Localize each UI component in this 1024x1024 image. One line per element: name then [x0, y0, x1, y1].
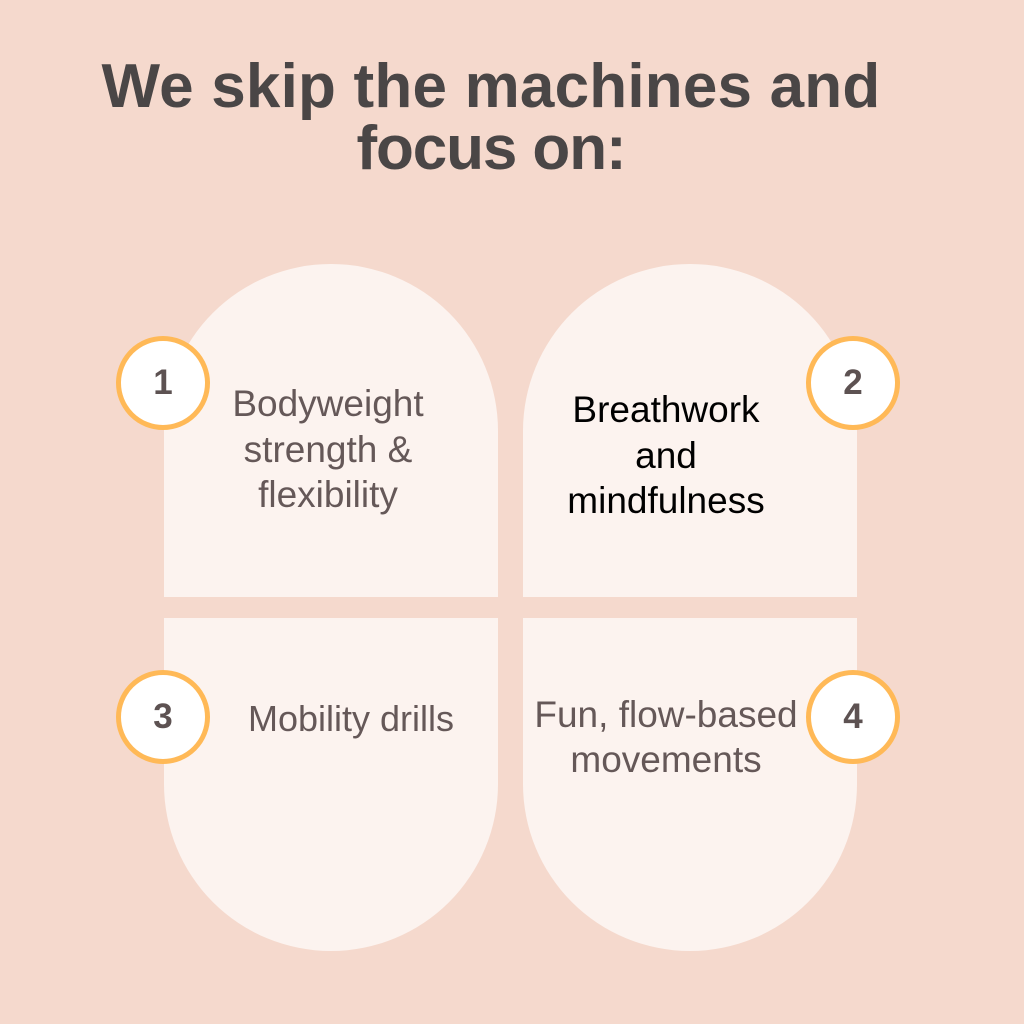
text: fun flow: [534, 694, 798, 780]
title: [102, 52, 880, 183]
text: bodyweight: flexibility: [258, 474, 398, 515]
panel: top left: [164, 264, 498, 597]
badge 1: [116, 336, 210, 430]
text: bodyweight: Bodyweight: [232, 383, 424, 424]
text: breathwork: mindfulness: [567, 480, 765, 521]
badge 2: [806, 336, 900, 430]
panel: top right: [523, 264, 857, 597]
panel: bottom left: [164, 618, 498, 951]
badge 3: 3: [153, 697, 173, 736]
badge 3: [116, 670, 210, 764]
title: focus on:: [356, 114, 626, 183]
text: bodyweight: [232, 383, 424, 515]
text: breathwork: and: [635, 434, 697, 476]
text: breathwork: Breathwork: [572, 389, 760, 430]
title: We skip the machines and: [102, 52, 880, 121]
text: bodyweight: strength &: [244, 428, 412, 470]
badge 1: 1: [153, 363, 173, 402]
panel: bottom right: [523, 618, 857, 951]
text: fun flow: Fun, flow-based: [534, 694, 798, 735]
text: breathwork: [567, 389, 765, 521]
text: mobility: Mobility drills: [248, 698, 454, 739]
badge 4: [806, 670, 900, 764]
badge 4: 4: [843, 697, 863, 736]
text: fun flow: movements: [570, 739, 762, 780]
badge 2: 2: [843, 363, 863, 402]
